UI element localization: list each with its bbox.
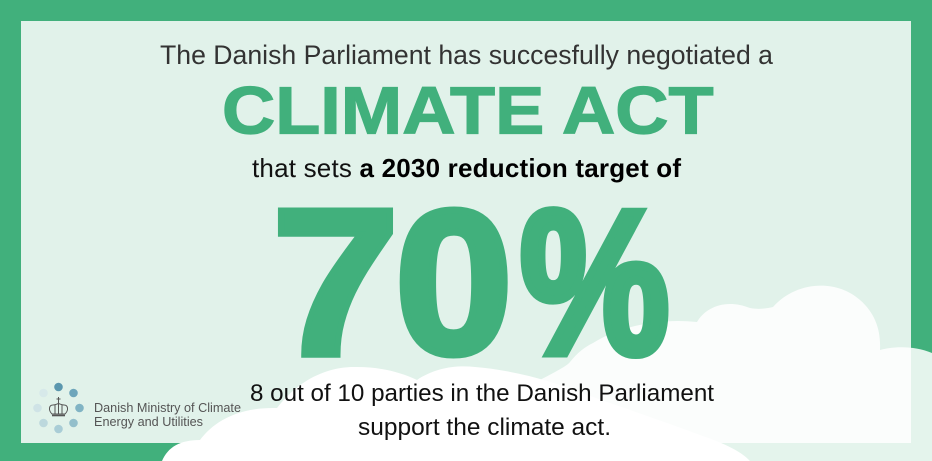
big number: 70% <box>271 164 669 400</box>
front cloud, solid white <box>162 366 750 461</box>
supporting statement: support the climate act. <box>358 414 611 441</box>
supporting statement <box>250 380 714 441</box>
subheading: reduction target: that sets a 2030 reduction target of <box>252 153 681 183</box>
big number: 70%: 7 <box>271 164 400 400</box>
back cloud, translucent <box>540 286 932 461</box>
heading: climate act: CLIMATE ACT <box>222 73 714 148</box>
icon: crown <box>49 397 68 416</box>
logo wordmark: Energy and Utilities <box>94 415 203 429</box>
big number: 70%: % <box>520 168 669 397</box>
logo: Danish Ministry of Climate, Energy and Utilities <box>33 383 241 433</box>
supporting statement: 8 out of 10 parties in the Danish Parliament <box>250 380 714 407</box>
big number: 70%: 0 <box>395 169 513 397</box>
logo wordmark: Danish Ministry of Climate <box>94 401 241 415</box>
logo wordmark <box>94 401 241 429</box>
heading: intro line: The Danish Parliament has succesfully negotiated a <box>160 40 774 70</box>
icon: ring of dots <box>33 383 84 433</box>
